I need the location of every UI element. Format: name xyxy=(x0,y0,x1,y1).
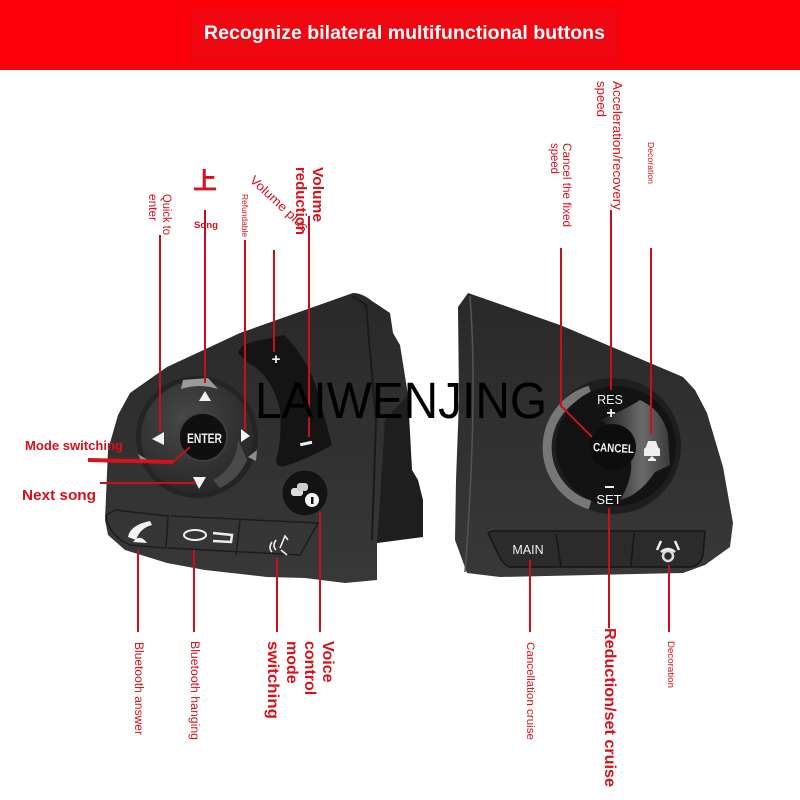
main label: MAIN xyxy=(512,543,544,557)
volume rocker xyxy=(238,335,332,466)
arrow down xyxy=(193,477,206,489)
side connector xyxy=(375,395,423,543)
label: next song: Next song xyxy=(22,488,96,504)
right control unit xyxy=(455,293,733,577)
left unit side ribs xyxy=(352,296,376,540)
dial silver ring xyxy=(547,390,590,505)
title: Recognize bilateral multifunctional buttons xyxy=(204,23,605,44)
minus icon xyxy=(300,441,312,446)
left unit housing xyxy=(105,293,408,583)
right unit housing xyxy=(455,293,733,577)
arrow right xyxy=(241,429,250,442)
label: decoration top: Decoration xyxy=(646,142,655,184)
label: voice control mode switching xyxy=(264,641,336,719)
label: refundable: Refundable xyxy=(240,194,249,238)
label: volume reduction: Volume xyxy=(309,167,325,222)
res label: RES xyxy=(597,393,623,407)
pointer lines xyxy=(100,210,669,632)
info button xyxy=(282,470,328,516)
phone hang up icon xyxy=(184,530,232,542)
label: bluetooth answer: Bluetooth answer xyxy=(132,642,144,735)
set minus xyxy=(605,486,614,488)
label: cancel the fixed speed: speed xyxy=(548,143,562,174)
label: mode switching: Mode switching xyxy=(25,439,123,453)
directional dial xyxy=(136,376,258,498)
label: quick to enter: Quick to xyxy=(160,194,172,235)
label: cancel the fixed speed xyxy=(548,143,574,227)
enter button xyxy=(179,413,227,461)
right unit edge xyxy=(465,296,473,572)
cancel label: CANCEL xyxy=(593,440,634,456)
enter label: ENTER xyxy=(187,430,222,446)
dial top highlight xyxy=(181,378,218,389)
arrow left xyxy=(152,432,164,445)
cancel button xyxy=(590,424,636,470)
label: voice control mode switching: switching xyxy=(264,641,281,719)
phone answer icon xyxy=(128,521,152,543)
small marker triangles xyxy=(138,450,257,463)
assist icon xyxy=(657,541,679,561)
label: reduction set cruise: Reduction/set cruise xyxy=(601,628,618,787)
label: quick to enter: enter xyxy=(146,194,158,221)
label: cancel the fixed speed: Cancel the fixed xyxy=(560,143,574,227)
set label: SET xyxy=(596,492,622,507)
right bottom button row xyxy=(488,531,705,567)
label: bluetooth hanging: Bluetooth hanging xyxy=(188,641,200,740)
right lever xyxy=(600,400,670,500)
car icon xyxy=(644,441,660,461)
label: acceleration recovery speed xyxy=(594,81,624,211)
label: volume reduction xyxy=(292,167,325,235)
label: decoration bottom: Decoration xyxy=(666,641,676,688)
res plus: + xyxy=(606,405,616,422)
label: previous song character: 上 xyxy=(193,161,217,196)
label: voice control mode switching: Voice xyxy=(319,641,336,683)
label: voice control mode switching: control xyxy=(301,641,318,695)
back arrow icon xyxy=(213,533,232,542)
arrow up xyxy=(199,391,211,401)
plus icon: + xyxy=(272,351,281,368)
label: voice control mode switching: mode xyxy=(283,641,300,684)
label: volume reduction: reduction xyxy=(292,167,308,235)
dial lower right shade xyxy=(213,440,247,488)
cruise dial xyxy=(545,378,681,514)
label: cancellation cruise: Cancellation cruise xyxy=(524,642,536,740)
watermark: LAIWENJING xyxy=(255,372,547,429)
header banner xyxy=(0,0,800,70)
label: acceleration recovery speed: Acceleration/recovery xyxy=(610,81,624,211)
label: quick to enter xyxy=(146,194,172,235)
voice icon xyxy=(270,536,288,555)
label: acceleration recovery speed: speed xyxy=(594,81,608,117)
label: volume plus: Volume plus xyxy=(247,173,311,234)
mode switching pointer xyxy=(88,460,173,462)
label: song: Song xyxy=(194,220,218,231)
left control unit xyxy=(105,293,423,583)
bottom button row xyxy=(106,510,318,555)
info icon xyxy=(291,483,319,507)
